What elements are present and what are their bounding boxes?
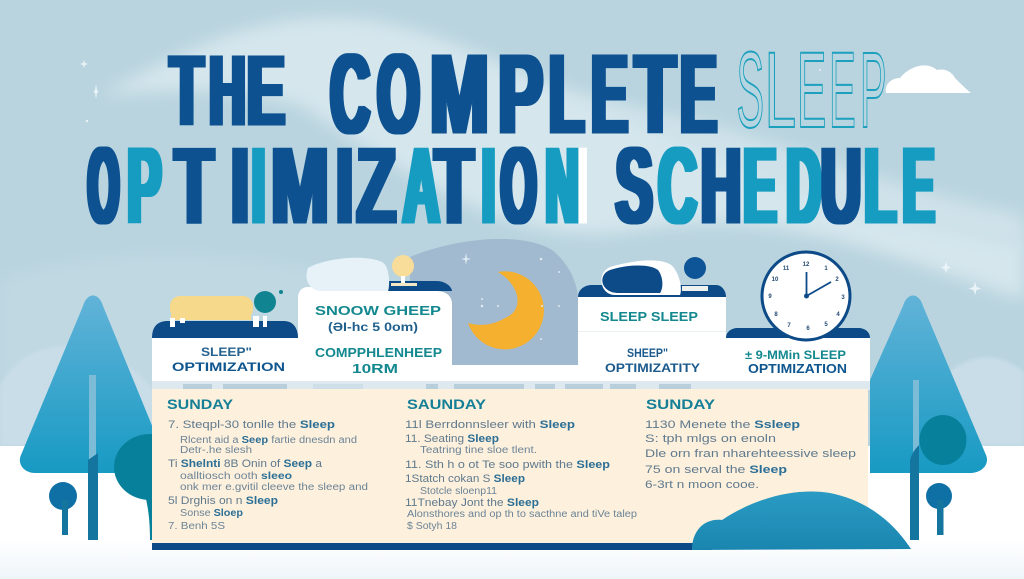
title line 2: L (864, 125, 896, 247)
card 3 label: SLEEP SLEEP (600, 309, 698, 324)
icon: clock: 9 (768, 294, 772, 300)
title line 2: H (701, 125, 741, 247)
stars (80, 60, 982, 295)
column 1: 7. Steqpl-30 tonlle the Sleep (168, 419, 335, 431)
large right tree (870, 296, 987, 473)
title line 1: O (377, 31, 420, 157)
panel: schedule (152, 389, 868, 550)
column 2: 11. Sth h o ot Te soo pwith the Sleep (405, 459, 610, 471)
large left tree (20, 296, 153, 473)
card 2 label: COMPPHLENHEEP (315, 345, 442, 360)
title line 2: P (128, 125, 161, 247)
title line 1: T (635, 31, 676, 157)
title line 2: C (658, 125, 697, 247)
title word: sleep outlined: S (736, 29, 764, 150)
small left tree (49, 482, 77, 535)
column 2: $ Sotyh 18 (407, 521, 457, 532)
title line 2: Z (357, 125, 396, 247)
title line 2: O (88, 125, 119, 247)
column 2: SAUNDAY (407, 396, 487, 412)
title line 1: M (430, 31, 489, 157)
column 2: Alonsthores and op th to sacthne and tiVe talep (407, 509, 637, 520)
title word: sleep outlined (736, 29, 886, 150)
column 1: onk mer e.gvitil cleeve the sleep and (180, 482, 368, 493)
icon: clock: 1 (824, 266, 828, 272)
column 1: 5l Drghis on n Sleep (168, 495, 278, 507)
column 2: 11l Berrdonnsleer with Sleep (405, 419, 575, 431)
moon night panel (410, 239, 578, 381)
icon: clock: 8 (774, 312, 778, 318)
title line 2: I (336, 125, 353, 247)
right tree group (870, 296, 987, 540)
icon: clock: 5 (824, 322, 828, 328)
title line 1: C (330, 31, 370, 157)
column 3: Dle orn fran nharehteessive sleep (645, 448, 856, 460)
snowy ground (0, 446, 1024, 579)
title line 2 (88, 125, 934, 247)
column 3: 1130 Menete the Ssleep (645, 419, 800, 431)
night stars (461, 253, 560, 340)
card 1 label: SLEEP" (201, 345, 252, 359)
icon: clock (762, 252, 850, 340)
column 3: 75 on serval the Sleep (645, 464, 787, 476)
column 3: S: tph mlgs on enoln (645, 433, 776, 445)
title line 2: S (616, 125, 653, 247)
column 2: Teatring tine sloe tlent. (420, 445, 537, 456)
icon: clock: 2 (835, 277, 839, 283)
teal bush (114, 434, 186, 540)
title line 1: E (247, 35, 285, 147)
left tree group (20, 296, 186, 540)
column 2 (405, 396, 637, 532)
title line 1 (170, 31, 717, 157)
column 1: SUNDAY (167, 396, 234, 412)
cloud (886, 65, 971, 93)
card 1: bed (152, 290, 298, 381)
title line 1: L (549, 31, 584, 157)
title line 2: D (786, 125, 821, 247)
column 1: oalltiosch ooth sleeo (180, 471, 292, 482)
title line 2: T (175, 125, 214, 247)
title line 2: N (546, 125, 578, 247)
column 2: Stotcle sloenp11 (420, 486, 497, 497)
icon: clock: 10 (772, 277, 779, 283)
title line 2: I (581, 125, 585, 247)
text: E (903, 125, 934, 247)
title word: sleep outlined: L (764, 29, 796, 150)
title line 1: P (498, 31, 543, 157)
card 4 label: OPTIMIZATION (748, 361, 847, 376)
column 2: 1Statch cokan S Sleep (405, 473, 525, 485)
title line 2: A (403, 125, 439, 247)
title word: sleep outlined: E (829, 29, 856, 150)
card 4 label: ± 9-MMin SLEEP (745, 348, 846, 362)
card 2 label: SNOOW GHEEP (315, 303, 441, 318)
moon (468, 271, 544, 349)
title: P (860, 29, 886, 150)
icon: bed (170, 290, 283, 327)
icon: clock: 4 (836, 312, 840, 318)
icon: clock: 7 (787, 323, 791, 329)
card 2 label (315, 303, 442, 376)
icon: clock: 11 (783, 266, 790, 272)
icon: clock: 12 (803, 262, 810, 268)
title line 1: T (170, 35, 203, 147)
right tree trunk (910, 380, 919, 540)
card 3 label: OPTIMIZATITY (605, 361, 700, 375)
card 1 label (172, 345, 285, 374)
title: E (680, 31, 717, 157)
card 3 label: SHEEP" (627, 346, 668, 360)
card 2 label: 10RM (352, 361, 398, 376)
column 2: 11. Seating Sleep (405, 433, 499, 445)
hill foreground (692, 491, 911, 550)
card 4 label (745, 348, 847, 376)
column 1: Ti Shelnti 8B Onin of Seep a (168, 458, 323, 470)
title line 2: M (271, 125, 329, 247)
title word: sleep outlined: E (797, 29, 826, 150)
card 1 label: OPTIMIZATION (172, 360, 285, 374)
column 2: 11Tnebay Jont the Sleep (405, 497, 539, 509)
column 3: 6-3rt n moon cooe. (645, 479, 759, 491)
title line 2: T (435, 125, 474, 247)
column 1: Detr-.he slesh (180, 445, 252, 456)
title line 2: I (482, 125, 495, 247)
card 3 label (600, 309, 700, 375)
column 1: 7. Benh 5S (168, 521, 225, 532)
card 4: clock (726, 252, 870, 381)
column 1: Rlcent aid a Seep fartie dnesdn and (180, 435, 357, 446)
icon: pillow and lamp (306, 255, 417, 291)
column 3: SUNDAY (646, 396, 716, 412)
title line 2: O (501, 125, 536, 247)
card 2: pillow (298, 255, 452, 381)
schedule strip (152, 381, 870, 390)
column 1 (167, 396, 368, 532)
title line 1: H (209, 35, 245, 147)
icon: clock: 3 (841, 295, 845, 301)
small right tree (926, 483, 952, 535)
title line 2: E (744, 125, 776, 247)
column 1: Sonse Sloep (180, 508, 243, 519)
left tree trunk (88, 375, 98, 540)
icon: clock: 6 (806, 326, 810, 332)
card 3: sleeping (578, 257, 726, 381)
title line 1: E (591, 31, 628, 157)
card 2 label: (ƏI-hc 5 0om) (328, 320, 418, 334)
icon: sleeper under blanket (601, 257, 708, 295)
title (88, 29, 934, 247)
bottom bar (152, 543, 712, 550)
title line 2: I (231, 125, 249, 247)
teal round tree (920, 415, 966, 465)
title line 2: U (821, 125, 861, 247)
column 3 (645, 396, 856, 491)
title line 2: I (252, 125, 265, 247)
